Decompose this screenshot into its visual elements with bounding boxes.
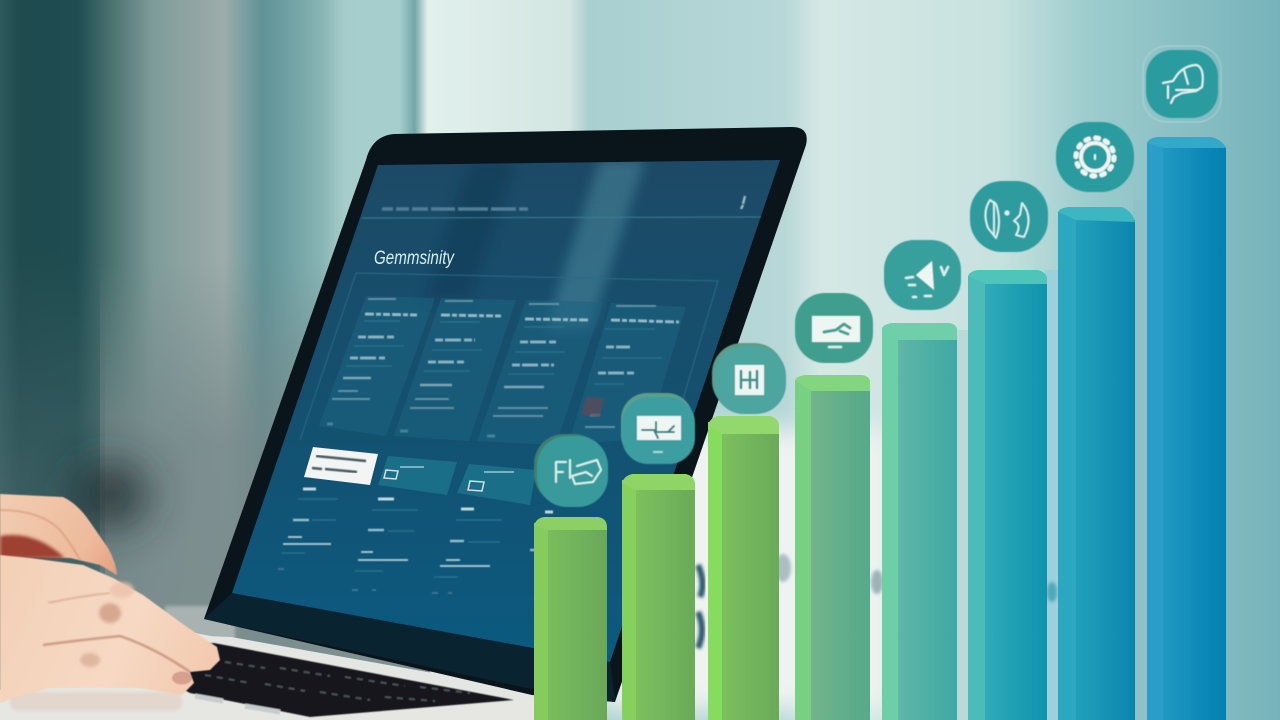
- bar 3: [708, 416, 779, 720]
- icon: monitor map: [621, 393, 695, 464]
- white tile on screen: [304, 447, 378, 485]
- icon: grid card: [712, 343, 786, 414]
- upper hand: [0, 494, 117, 575]
- laptop screen: [232, 160, 780, 662]
- bar 7: [1058, 207, 1135, 720]
- lower bezel band: [204, 593, 615, 702]
- hands: [0, 494, 220, 711]
- palm rest: [10, 692, 182, 711]
- bar 8: [1147, 137, 1226, 720]
- keyboard: [110, 643, 514, 717]
- hinge strip: [207, 636, 534, 701]
- bar 4: [795, 375, 870, 720]
- icon: chart sketch: [534, 434, 608, 507]
- screen card text lines: [327, 299, 679, 436]
- dark gap under fingers: [100, 640, 195, 672]
- floating icons: [534, 46, 1221, 507]
- bar 2: [622, 474, 695, 720]
- laptop: [0, 127, 807, 720]
- icon: gear ring: [1056, 122, 1134, 192]
- icon: megaphone: [884, 240, 961, 310]
- small red tile on screen: [581, 397, 604, 417]
- bar 5: [882, 323, 957, 720]
- screen reflections: [425, 160, 645, 330]
- teal tiles on screen: [378, 456, 536, 505]
- bar 1: [534, 517, 607, 720]
- screen lower text columns: [278, 489, 554, 593]
- screen header: [300, 196, 761, 440]
- screen cards: [319, 296, 686, 445]
- icon: screen growth: [795, 293, 873, 363]
- bar 6: [968, 270, 1047, 720]
- lower hand: [0, 555, 220, 703]
- bar chart: [534, 137, 1226, 720]
- laptop lid bezel: [204, 127, 807, 702]
- screen title: Gemmsinity: [374, 248, 455, 269]
- icon: hand gesture: [1143, 46, 1221, 122]
- dark cable seen between bars: [698, 565, 703, 648]
- icon: figures: [970, 181, 1048, 252]
- laptop base: [0, 632, 560, 720]
